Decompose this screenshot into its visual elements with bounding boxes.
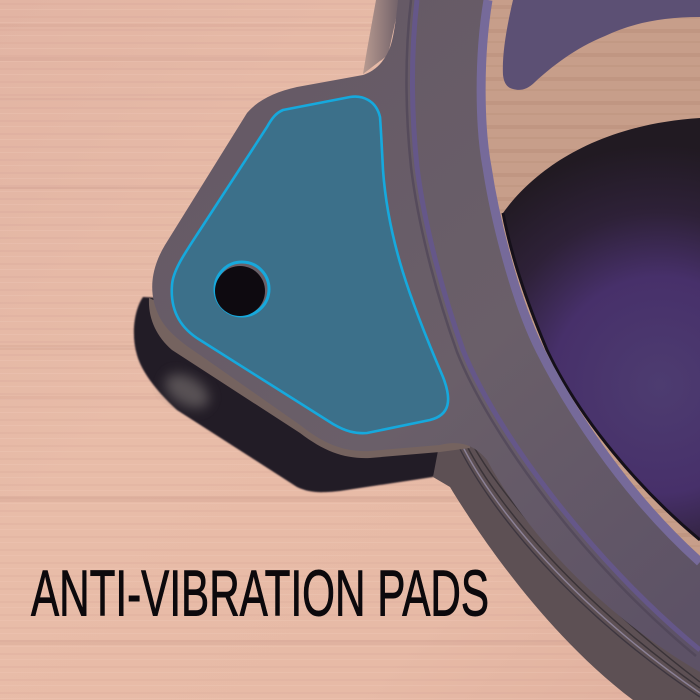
frame outer purple ring [412,0,700,650]
frame outer groove shadow [406,0,696,656]
inner opening wood [481,0,700,562]
frame side ribs [458,445,700,697]
anti-vibration pad [172,97,448,433]
fan frame front lip [149,298,470,458]
blade dark edge [503,213,700,540]
upper fan blade [503,0,700,90]
frame inner purple ring [481,0,700,562]
bracket highlight [159,367,215,415]
rear frame layer at top [363,0,400,74]
fan frame [152,0,700,672]
lower fan blade [503,118,700,540]
mounting screw hole [215,262,269,316]
lower frame side wall [433,440,700,700]
rear mounting bracket shadow [134,297,470,492]
